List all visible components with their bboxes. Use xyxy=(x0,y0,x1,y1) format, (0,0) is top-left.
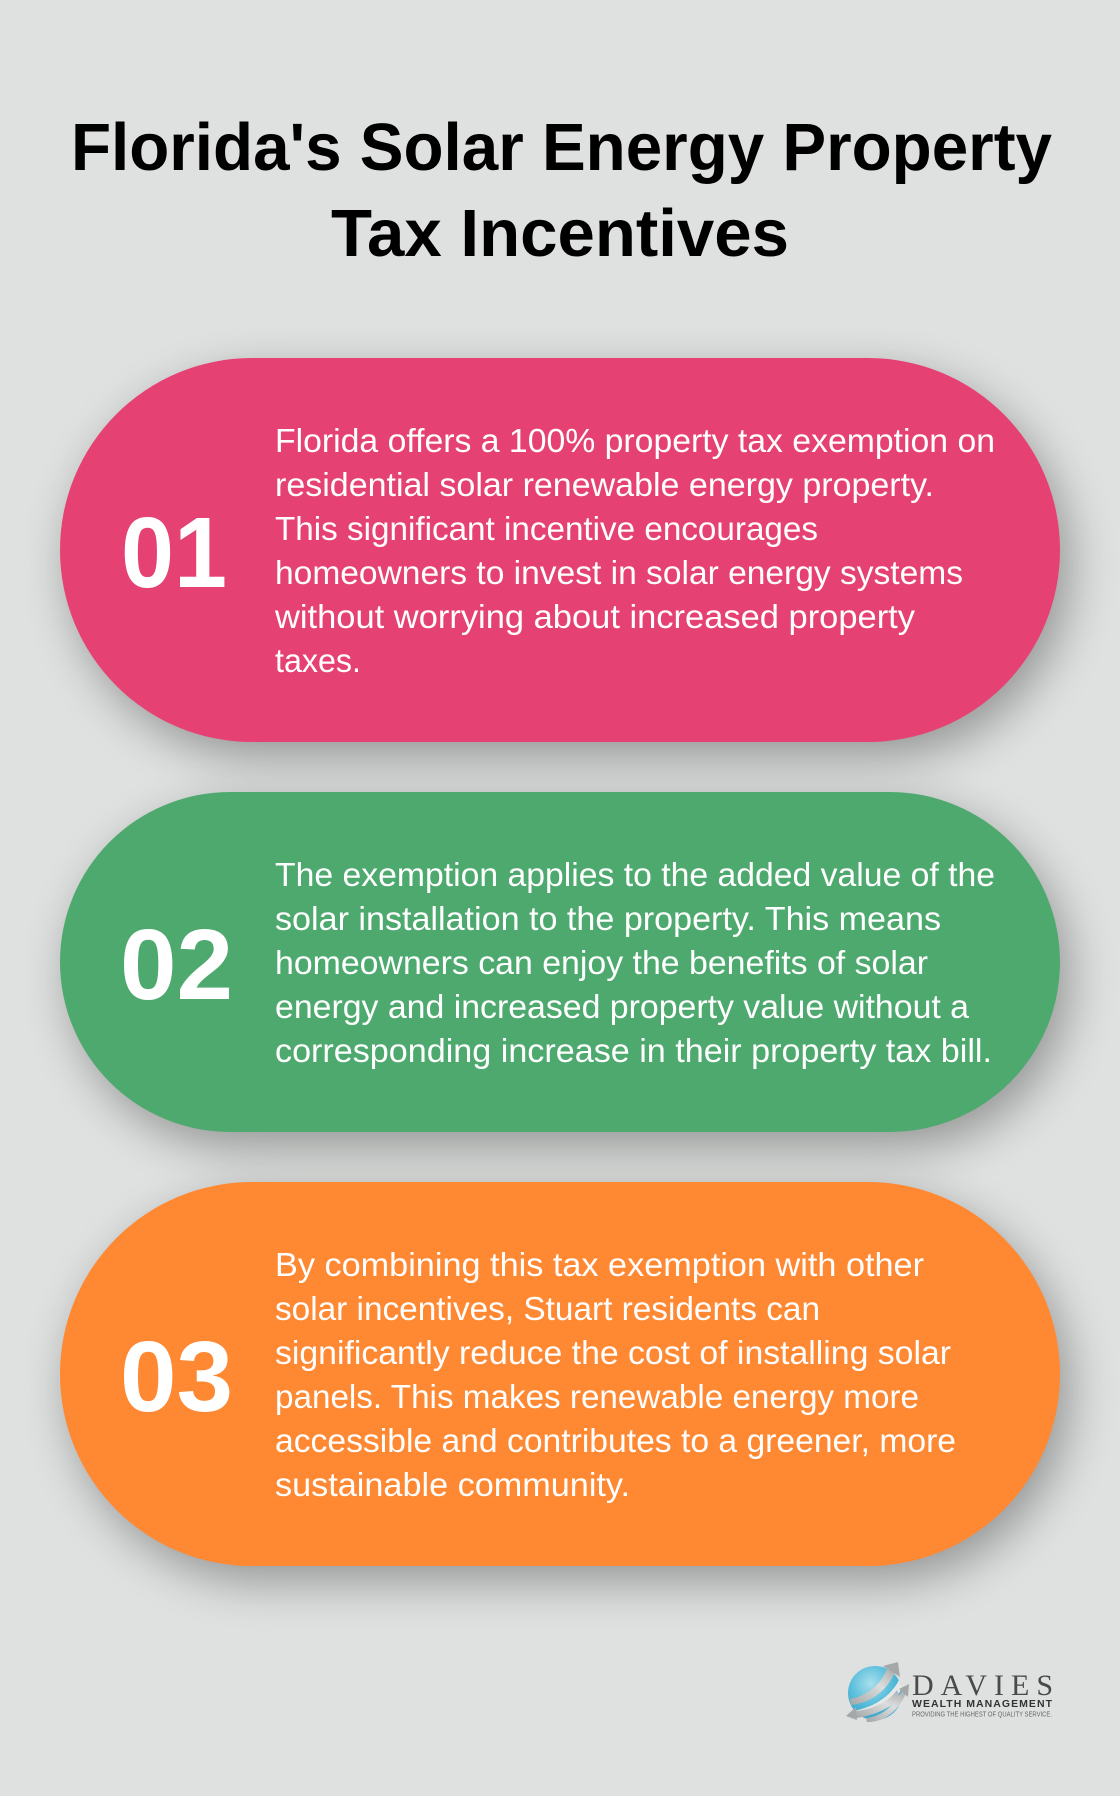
number 01: 01 xyxy=(121,497,227,609)
text block: card 02: solar installation to the property. This means xyxy=(275,900,941,937)
text block: card 03: significantly reduce the cost of installing solar xyxy=(275,1334,951,1371)
text block: card 03: panels. This makes renewable energy more xyxy=(275,1378,919,1415)
panel: card 03 xyxy=(60,1182,1060,1566)
text block: card 03: By combining this tax exemption with other xyxy=(275,1246,924,1283)
logo wordmark xyxy=(912,1669,1053,1718)
text block: card 01: This significant incentive encourages xyxy=(275,510,818,547)
text block: card 02: energy and increased property value without a xyxy=(275,988,970,1025)
text block: card 02: homeowners can enjoy the benefits of solar xyxy=(275,944,928,981)
text block: card 01: taxes. xyxy=(275,642,361,679)
text block: card 02 xyxy=(275,856,995,1069)
panel: card 02 xyxy=(60,792,1060,1132)
text block: card 01: residential solar renewable energy property. xyxy=(275,466,934,503)
logo wordmark: DAVIES xyxy=(912,1669,1053,1702)
title: Tax Incentives xyxy=(331,196,789,271)
logo: Davies Wealth Management xyxy=(846,1662,1053,1722)
title xyxy=(71,110,1052,271)
text block: card 01 xyxy=(274,422,995,679)
number 02: 02 xyxy=(120,909,233,1021)
text block: card 01: Florida offers a 100% property tax exemption on xyxy=(275,422,995,459)
text block: card 03: sustainable community. xyxy=(275,1466,630,1503)
text block: card 03 xyxy=(275,1246,956,1503)
logo wordmark: WEALTH MANAGEMENT xyxy=(912,1698,1053,1710)
number 03: 03 xyxy=(120,1321,233,1433)
text block: card 03: accessible and contributes to a greener, more xyxy=(275,1422,956,1459)
text block: card 03: solar incentives, Stuart residents can xyxy=(275,1290,820,1327)
text block: card 02: corresponding increase in their property tax bill. xyxy=(275,1032,992,1069)
icon: globe with arrows xyxy=(846,1662,909,1722)
text block: card 02: The exemption applies to the added value of the xyxy=(275,856,995,893)
text block: card 01: homeowners to invest in solar energy systems xyxy=(275,554,963,591)
title: Florida's Solar Energy Property xyxy=(71,110,1052,185)
text block: card 01: without worrying about increased property xyxy=(274,598,916,635)
panel: card 01 xyxy=(60,358,1060,742)
